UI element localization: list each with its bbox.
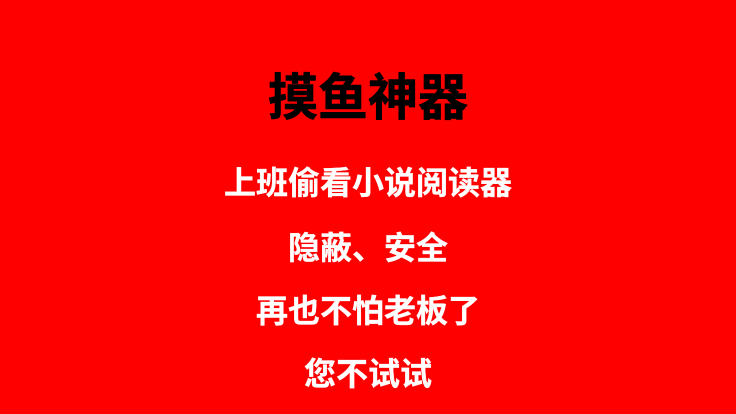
text line: call to action: 您不试试 [304,356,432,392]
text line: boss: 再也不怕老板了 [256,293,480,329]
title: 摸鱼神器 [268,70,468,126]
text line: hidden and safe: 隐蔽、安全 [288,230,448,266]
text line: subtitle: 上班偷看小说阅读器 [224,165,512,201]
